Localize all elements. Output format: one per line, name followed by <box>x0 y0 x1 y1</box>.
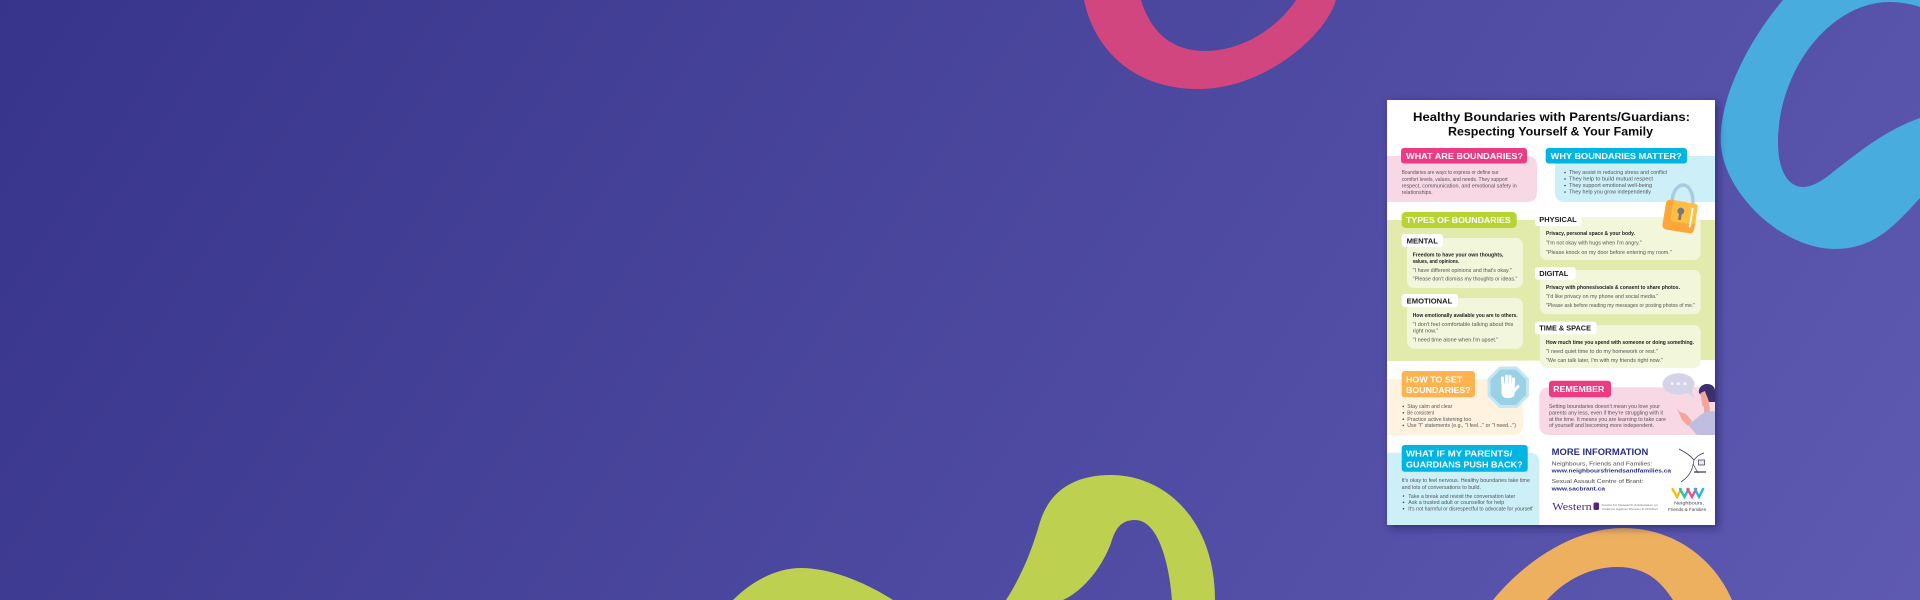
panel: what if my parents push back: WHAT IF MY PARENTS/ <box>1406 448 1513 458</box>
panel: how to set boundaries <box>1387 371 1523 435</box>
panel: how to set boundaries: HOW TO SET <box>1406 374 1463 384</box>
panel: how to set boundaries: Stay calm and clear <box>1407 404 1453 410</box>
card: physical: "I'm not okay with hugs when I'm angry." <box>1546 240 1642 246</box>
card: physical: Privacy, personal space & your body. <box>1546 231 1636 237</box>
panel: how to set boundaries: Be consistent <box>1407 410 1435 416</box>
decorative orange ribbon <box>1493 528 1732 600</box>
card: emotional: How emotionally available you are to others. <box>1413 313 1518 319</box>
panel: what are boundaries: WHAT ARE BOUNDARIES? <box>1406 151 1523 161</box>
card: physical: "Please knock on my door before entering my room." <box>1546 250 1672 256</box>
card: digital: "Please ask before reading my messages or posting photos of me." <box>1546 303 1695 309</box>
card: time and space: TIME & SPACE <box>1539 325 1591 332</box>
panel: types of boundaries <box>1387 212 1715 368</box>
card: time and space: How much time you spend with someone or doing something. <box>1546 340 1695 346</box>
card: time and space: "We can talk later, I'm with my friends right now." <box>1546 358 1663 364</box>
panel: types of boundaries: TYPES OF BOUNDARIES <box>1406 215 1511 225</box>
panel: what if my parents push back: and lots of conversations to build. <box>1402 485 1481 491</box>
logo: western <box>1552 501 1658 513</box>
panel: what are boundaries: comfort levels, values, and needs. They support <box>1402 177 1508 183</box>
panel: why boundaries matter <box>1546 148 1715 202</box>
panel: remember: REMEMBER <box>1553 384 1605 394</box>
logo: neighbours friends and families: Friends & Families <box>1668 507 1707 512</box>
panel: how to set boundaries: BOUNDARIES? <box>1406 385 1471 395</box>
more information block <box>1551 447 1672 492</box>
card: physical: PHYSICAL <box>1539 217 1577 224</box>
panel: remember <box>1539 381 1715 435</box>
panel: remember: parents any less, even if they're struggling with it <box>1549 410 1664 416</box>
card: emotional: "I need time alone when I'm upset." <box>1413 338 1499 344</box>
panel: why boundaries matter: They help to build mutual respect <box>1569 176 1654 182</box>
poster title: Respecting Yourself & Your Family <box>1448 126 1654 138</box>
panel: what are boundaries: respect, communication, and emotional safety in <box>1402 184 1517 190</box>
card: mental: values, and opinions. <box>1413 259 1460 265</box>
decorative blue ribbon <box>1721 0 1920 249</box>
icon: person with speech bubble <box>1662 373 1715 435</box>
more information block: www.sacbrant.ca <box>1551 486 1606 492</box>
panel: remember: Setting boundaries doesn't mean you love your <box>1549 404 1660 410</box>
more information block: www.neighboursfriendsandfamilies.ca <box>1551 469 1672 475</box>
card: digital <box>1535 267 1701 314</box>
card: mental: MENTAL <box>1407 238 1439 245</box>
poster title <box>1413 112 1690 138</box>
card: time and space <box>1535 322 1701 368</box>
card: mental <box>1402 234 1523 288</box>
more information block: MORE INFORMATION <box>1552 447 1648 457</box>
panel: remember: at the time. It means you are learning to take care <box>1549 417 1666 423</box>
card: mental: Freedom to have your own thoughts, <box>1413 252 1504 258</box>
card: digital: DIGITAL <box>1539 271 1569 278</box>
card: emotional: "I don't feel comfortable talking about this <box>1413 322 1514 328</box>
icon: stop hand sign <box>1488 366 1529 408</box>
logo: neighbours friends and families <box>1668 489 1707 512</box>
more information block: Neighbours, Friends and Families: <box>1552 461 1653 467</box>
card: physical <box>1535 214 1701 260</box>
panel: what are boundaries <box>1387 148 1537 202</box>
poster sheet <box>1387 100 1715 525</box>
card: digital: Privacy with phones/socials & consent to share photos. <box>1546 285 1681 291</box>
panel: why boundaries matter: They assist in reducing stress and conflict <box>1569 170 1668 176</box>
panel: why boundaries matter: WHY BOUNDARIES MATTER? <box>1551 151 1682 161</box>
panel: remember: of yourself and becoming more independent. <box>1549 423 1654 429</box>
poster title: Healthy Boundaries with Parents/Guardians: <box>1413 112 1690 124</box>
logo: western: Violence Against Women & Children <box>1602 507 1658 511</box>
panel: what if my parents push back: It's okay to feel nervous. Healthy boundaries take time <box>1402 478 1530 484</box>
panel: what if my parents push back: Take a break and revisit the conversation later <box>1408 494 1516 500</box>
decorative pink ribbon <box>1084 0 1336 89</box>
logo: western: Western <box>1552 501 1592 513</box>
panel: what are boundaries: Boundaries are ways to express or define our <box>1402 170 1499 176</box>
panel: what if my parents push back: It's not harmful or disrespectful to advocate for yourself <box>1408 506 1533 512</box>
panel: what if my parents push back <box>1387 445 1539 525</box>
icon: padlock <box>1662 185 1698 234</box>
card: emotional: right now." <box>1413 328 1439 334</box>
card: digital: "I'd like privacy on my phone and social media." <box>1546 294 1659 300</box>
panel: what if my parents push back: Ask a trusted adult or counsellor for help <box>1408 500 1505 506</box>
card: mental: "Please don't dismiss my thoughts or ideas." <box>1413 276 1518 282</box>
panel: how to set boundaries: Practice active listening too <box>1407 417 1472 423</box>
card: mental: "I have different opinions and that's okay." <box>1413 268 1512 274</box>
panel: how to set boundaries: Use "I" statements (e.g., "I feel..." or "I need...") <box>1407 423 1516 429</box>
logo: western: Centre for Research & Education on <box>1602 503 1658 507</box>
speech bubble <box>1662 373 1694 398</box>
panel: what are boundaries: relationships. <box>1402 190 1433 196</box>
more information block: Sexual Assault Centre of Brant: <box>1552 479 1644 485</box>
card: time and space: "I need quiet time to do my homework or rest." <box>1546 349 1658 355</box>
decorative green ribbon <box>733 475 1215 600</box>
person figure <box>1677 384 1715 435</box>
logo: neighbours friends and families: Neighbours, <box>1674 500 1704 506</box>
panel: why boundaries matter: They help you grow independently <box>1569 190 1652 196</box>
card: emotional: EMOTIONAL <box>1407 299 1453 306</box>
logo: sexual assault centre of brant <box>1679 449 1706 482</box>
card: emotional <box>1402 294 1523 349</box>
poster <box>1387 100 1715 525</box>
panel: why boundaries matter: They support emotional well-being <box>1569 183 1652 189</box>
panel: what if my parents push back: GUARDIANS PUSH BACK? <box>1406 460 1523 470</box>
